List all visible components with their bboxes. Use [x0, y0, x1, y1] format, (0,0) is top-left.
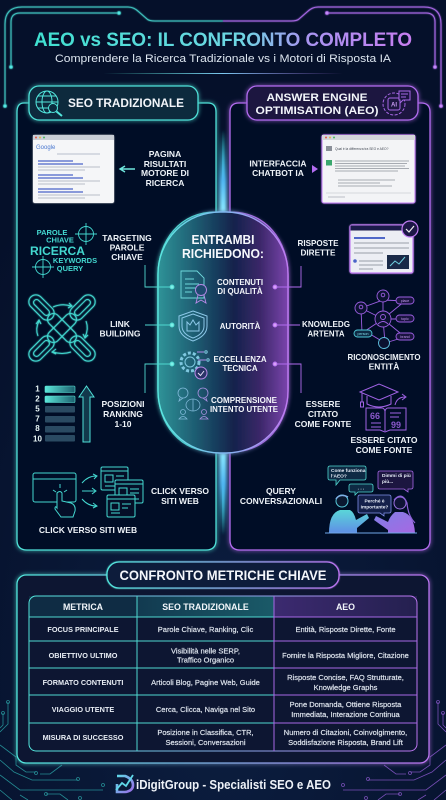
icon: keyword cloud: RICERCA: [30, 244, 85, 258]
label: ranking positions: POSIZIONI: [102, 399, 144, 409]
heading: both require: ENTRAMBI: [192, 233, 254, 247]
row: success measure: MISURA DI SUCCESSO: [43, 733, 124, 742]
label: ranking positions: 1-10: [114, 419, 132, 429]
label: search results page: RISULTATI: [144, 159, 186, 169]
browser: search results page: Google: [36, 145, 56, 151]
panel: key metrics comparison: [17, 562, 429, 763]
subtitle: Comprendere la Ricerca Tradizionale vs i Motori di Risposta IA: [55, 53, 392, 65]
row: main focus: FOCUS PRINCIPALE: [47, 625, 119, 634]
chart: ranking positions: [33, 384, 94, 444]
icon: entity knowledge graph: topic: [401, 317, 409, 321]
title divider: [103, 73, 343, 74]
text: technical excellence: TECNICA: [222, 364, 258, 373]
row: success measure: Soddisfazione Risposta, Brand Lift: [288, 738, 404, 747]
icon: keyword cloud: QUERY: [57, 264, 83, 273]
icon: globe with magnifier: [36, 91, 62, 116]
label: entity recognition: ENTITÀ: [369, 362, 399, 372]
icon: keyword cloud: [30, 223, 97, 278]
icon: shield crown: [179, 311, 207, 341]
label: ranking positions: [102, 399, 144, 429]
row: success measure: Sessioni, Conversazioni: [165, 738, 246, 747]
row: success measure: [43, 728, 407, 747]
label: link building: LINK: [110, 319, 131, 329]
row: ultimate goal: Visibilità nelle SERP,: [171, 646, 240, 656]
text: quality content: [217, 278, 263, 296]
label: chatbot interface: CHATBOT IA: [252, 168, 304, 178]
icon: click to websites: [33, 467, 143, 517]
center spine glow bottom: [219, 450, 227, 535]
icon: entity knowledge graph: [354, 290, 414, 348]
text: quality content: DI QUALITÀ: [217, 287, 263, 296]
text: technical excellence: ECCELLENZA: [213, 355, 267, 364]
row: success measure: Posizione in Classifica, CTR,: [157, 728, 254, 737]
row: content format: Knowledge Graphs: [314, 683, 378, 692]
label: link building: [99, 319, 141, 338]
speech bubbles: Perché è: [364, 498, 385, 504]
row: user journey: Cerca, Clicca, Naviga nel Sito: [156, 705, 255, 714]
row: success measure: Numero di Citazioni, Coinvolgimento,: [284, 728, 407, 737]
icon: keyword cloud: PAROLE: [37, 228, 67, 237]
row: ultimate goal: Traffico Organico: [177, 656, 234, 664]
circuit decoration: bottom right: [342, 700, 446, 800]
label: being cited bottom: COME FONTE: [356, 445, 413, 455]
header: AEO: ANSWER ENGINE: [266, 92, 368, 104]
icon: graduation cap and book: 99: [391, 420, 401, 430]
panel frame: metrics: [17, 575, 429, 763]
label: entity recognition: [348, 352, 421, 372]
person right: [374, 496, 415, 533]
label: keyword targeting: CHIAVE: [111, 252, 143, 262]
row: ultimate goal: [49, 646, 409, 664]
panel: SEO tradizionale: [17, 86, 216, 550]
top circuit frame: purple: [223, 7, 442, 107]
row: content format: Risposte Concise, FAQ Strutturate,: [287, 673, 404, 682]
chart: ranking positions: 10: [33, 434, 42, 444]
icon: AI brain gear: [383, 91, 410, 115]
arrow: to chatbot: [312, 165, 318, 173]
row: main focus: Entità, Risposte Dirette, Fonte: [295, 625, 396, 634]
center spine glow top: [219, 130, 227, 214]
label: knowledge graph: ARTENTA: [308, 328, 344, 338]
label: being cited bottom: ESSERE CITATO: [350, 435, 418, 445]
chatbot interface mockup: [322, 135, 415, 203]
heading: both require: RICHIEDONO:: [182, 247, 264, 261]
header: AEO: OPTIMISATION (AEO): [256, 105, 379, 117]
text: technical excellence: [213, 355, 267, 373]
speech bubbles: Come funziona: [331, 468, 366, 474]
title: AEO vs SEO: IL CONFRONTO COMPLETO: [34, 29, 412, 51]
table header: METRICA: [63, 602, 104, 612]
chart: ranking positions: 5: [35, 404, 40, 414]
speech bubbles: [328, 466, 413, 516]
arrow: to search page: [120, 166, 135, 172]
label: search results page: PAGINA: [149, 149, 181, 159]
label: entity recognition: RICONOSCIMENTO: [348, 352, 421, 362]
speech bubbles: Dimmi di più: [382, 473, 411, 479]
chart: ranking positions: 2: [35, 394, 40, 404]
icon: user intent minds: [178, 388, 208, 419]
icon: document certificate: [181, 271, 206, 303]
label: search results page: MOTORE DI: [141, 168, 189, 178]
label: being cited: CITATO: [308, 409, 338, 419]
panel frame: SEO: [17, 103, 216, 550]
table header: [63, 602, 355, 612]
label: click to sites bottom: CLICK VERSO SITI WEB: [39, 525, 137, 535]
browser: search results page: [33, 135, 114, 203]
row: content format: FORMATO CONTENUTI: [43, 678, 123, 687]
top circuit frame: teal: [4, 7, 223, 107]
label: keyword targeting: PAROLE: [110, 242, 145, 252]
row: user journey: [52, 700, 402, 719]
circuit decoration: bottom left: [0, 700, 104, 800]
label: being cited: ESSERE: [306, 399, 341, 409]
label: keyword targeting: [102, 233, 152, 262]
text: authority: AUTORITÀ: [220, 322, 261, 331]
table header: AEO: [336, 602, 355, 612]
label: conversational queries: CONVERSAZIONALI: [240, 496, 322, 506]
label: keyword targeting: TARGETING: [102, 233, 152, 243]
icon: conversation between two people: [325, 466, 417, 533]
row: content format: Articoli Blog, Pagine Web, Guide: [151, 678, 260, 687]
label: knowledge graph: [302, 319, 350, 338]
icon: gear technical: [181, 351, 209, 379]
label: ranking positions: RANKING: [103, 409, 143, 419]
icon: direct answer card: [350, 221, 418, 273]
label: search results page: RICERCA: [146, 178, 184, 188]
label: conversational queries: QUERY: [266, 486, 296, 496]
connector: knowledge to authority: [273, 323, 300, 327]
label: being cited bottom: [350, 435, 418, 455]
connector: targeting to quality content: [145, 265, 174, 289]
chart: ranking positions: 7: [35, 414, 40, 424]
text: user intent: [210, 396, 278, 414]
chatbot interface mockup: Qual è la differenza tra SEO e AEO?: [335, 147, 389, 151]
icon: keyword cloud: CHIAVE: [46, 236, 74, 244]
row: ultimate goal: Fornire la Risposta Migliore, Citazione: [282, 651, 409, 660]
table header: SEO TRADIZIONALE: [162, 602, 249, 612]
label: chatbot interface: INTERFACCIA: [249, 158, 307, 168]
icon: AI brain gear: AI: [391, 102, 397, 108]
text: user intent: INTENTO UTENTE: [210, 405, 278, 414]
row: user journey: VIAGGIO UTENTE: [52, 705, 114, 714]
connector: link building to authority: [145, 323, 174, 327]
row: main focus: Parole Chiave, Ranking, Clic: [158, 625, 253, 634]
label: chatbot interface: [249, 158, 307, 178]
chart: ranking positions: 1: [35, 384, 40, 394]
row: user journey: Pone Domanda, Ottiene Risposta: [290, 700, 402, 709]
connector: cited to technical excellence: [273, 362, 301, 393]
row: content format: [43, 673, 404, 692]
label: search results page: [141, 149, 189, 188]
header: AEO: [247, 86, 418, 120]
panel frame: AEO: [230, 103, 430, 550]
icon: graduation cap and book: [360, 384, 406, 432]
text: user intent: COMPRENSIONE: [211, 396, 277, 405]
label: click to sites right: [151, 486, 209, 506]
label: being cited: COME FONTE: [295, 419, 352, 429]
person left: [329, 495, 369, 533]
icon: graduation cap and book: 66: [370, 411, 380, 421]
row: user journey: Immediata, Interazione Continua: [291, 710, 401, 719]
label: link building: BUILDING: [99, 328, 141, 338]
speech bubbles: . . .: [358, 486, 364, 492]
label: direct answers: DIRETTE: [300, 248, 336, 258]
header: SEO tradizionale: SEO TRADIZIONALE: [68, 98, 184, 110]
chart: ranking positions: 8: [35, 424, 40, 433]
panel: both require capsule: [158, 212, 288, 453]
text: quality content: CONTENUTI: [217, 278, 263, 287]
row: ultimate goal: OBIETTIVO ULTIMO: [49, 651, 118, 660]
icon: entity knowledge graph: brand: [400, 335, 410, 339]
label: knowledge graph: KNOWLEDG: [302, 319, 350, 329]
heading: key metrics: CONFRONTO METRICHE CHIAVE: [120, 568, 326, 583]
label: being cited: [295, 399, 352, 429]
connector: direct answers to quality content: [273, 266, 301, 289]
connector: ranking to technical excellence: [145, 362, 174, 393]
footer brand text: iDigitGroup - Specialisti SEO e AEO: [136, 778, 331, 792]
icon: entity knowledge graph: person: [358, 332, 368, 336]
label: click to sites right: CLICK VERSO: [151, 486, 209, 496]
heading: both require: [182, 233, 264, 261]
panel: answer engine optimisation: [230, 86, 430, 550]
icon: link chain: [26, 292, 98, 364]
label: direct answers: RISPOSTE: [298, 238, 339, 248]
header: SEO tradizionale: [29, 86, 198, 120]
label: click to sites right: SITI WEB: [161, 496, 199, 506]
label: conversational queries: [240, 486, 322, 506]
speech bubbles: importante?: [361, 504, 388, 510]
table: metrics: [29, 596, 417, 751]
heading: key metrics: [107, 562, 339, 588]
speech bubbles: più...: [382, 479, 393, 485]
icon: keyword cloud: KEYWORDS: [53, 256, 97, 265]
speech bubbles: l'AEO?: [331, 474, 347, 480]
icon: entity knowledge graph: place: [401, 299, 409, 303]
row: main focus: [47, 625, 396, 634]
label: direct answers: [298, 238, 339, 258]
footer logo: [116, 775, 133, 792]
